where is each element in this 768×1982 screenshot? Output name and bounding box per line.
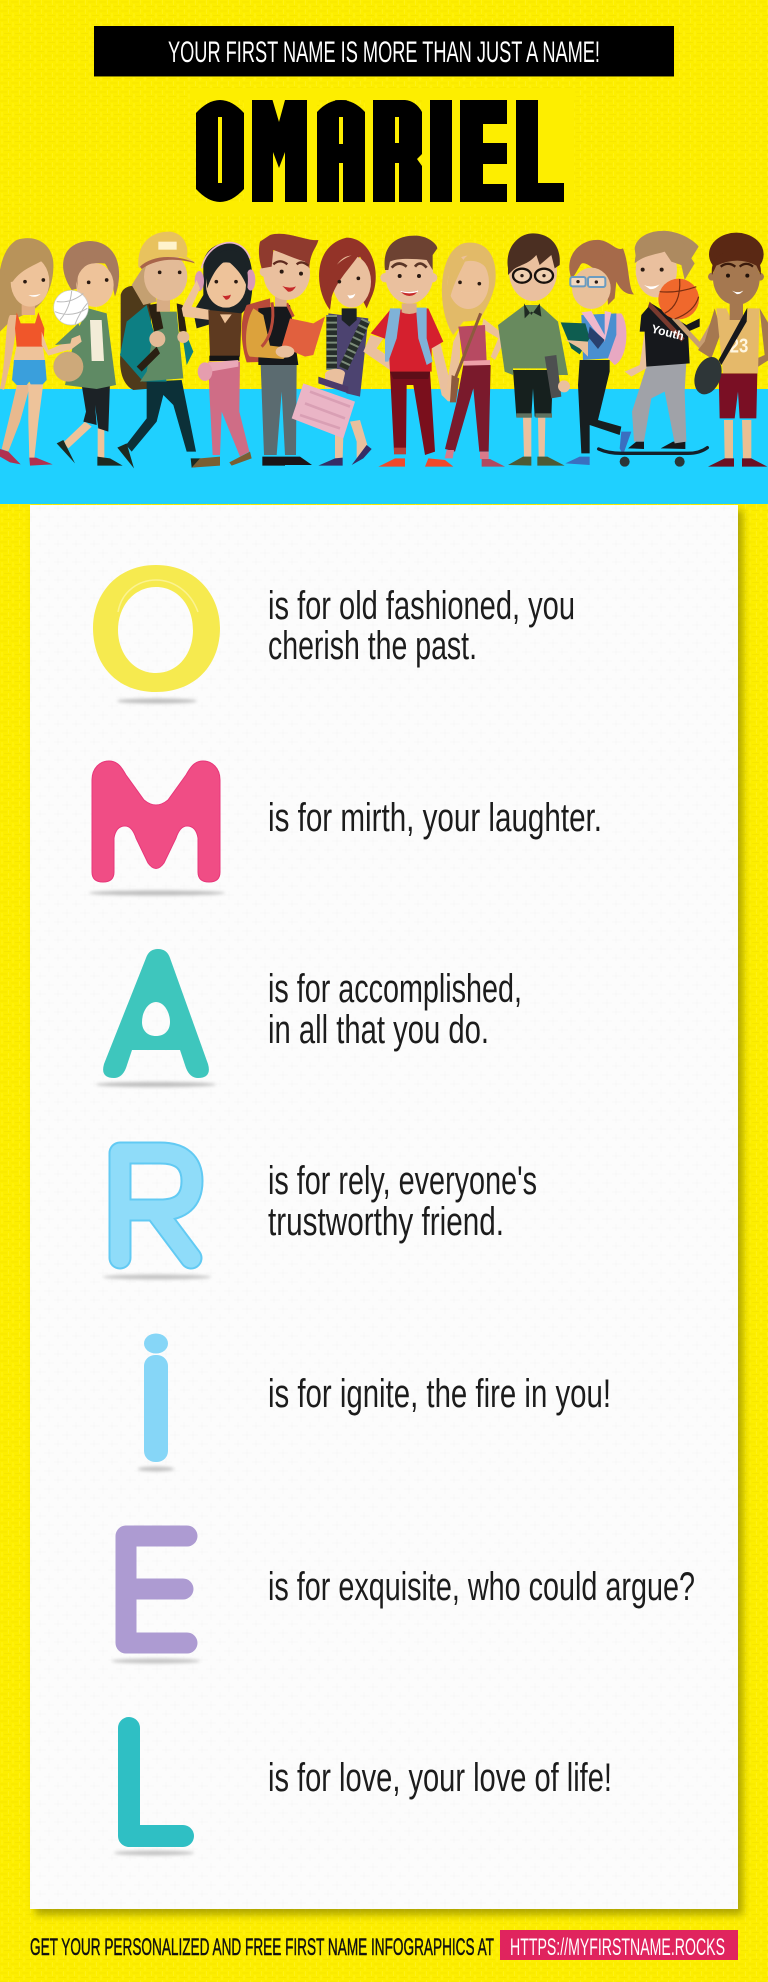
person: girl with volleyball (53, 241, 123, 466)
title: name (190, 72, 575, 229)
letter A (96, 949, 216, 1087)
person: boy with glasses (498, 233, 570, 466)
letter R (103, 1153, 211, 1280)
title: name: A (320, 72, 362, 229)
title: name: M (250, 72, 309, 229)
letter M (89, 761, 225, 896)
header banner (94, 26, 674, 77)
person: girl with ponytail and book (561, 240, 634, 465)
text: R line: trustworthy friend. (268, 1200, 504, 1244)
letter E (112, 1536, 200, 1664)
text: O line: cherish the past. (268, 624, 477, 668)
text: O line (268, 584, 575, 668)
text: L line: is for love, your love of life! (268, 1756, 612, 1800)
illustration: group of young people (0, 231, 768, 468)
person: boy with cap and backpack (117, 232, 201, 468)
person: girl in orange top (0, 238, 82, 466)
text: A line: in all that you do. (268, 1008, 489, 1052)
text: I line: is for ignite, the fire in you! (268, 1372, 611, 1416)
title: name: E (458, 72, 504, 229)
title: name: I (426, 72, 456, 229)
person: blonde girl (442, 243, 507, 467)
letter I (138, 1334, 174, 1472)
person: boy on skateboard with basketball: Youth (650, 322, 685, 343)
blue ground band (0, 389, 768, 504)
person: girl with headphones (182, 242, 255, 468)
text: A line: is for accomplished, (268, 967, 522, 1011)
person: boy in red shirt (363, 236, 453, 467)
letter O (93, 565, 220, 704)
text: O line: is for old fashioned, you (268, 584, 575, 628)
text: M line: is for mirth, your laughter. (268, 796, 602, 840)
title: name: O (198, 78, 242, 224)
letter L (114, 1728, 194, 1856)
person: boy in yellow tank with shoulder bag: 23 (730, 335, 748, 357)
person: boy in yellow tank with shoulder bag (689, 233, 768, 467)
text: A line (268, 967, 522, 1052)
title: name: L (514, 72, 561, 229)
title: name: R (371, 72, 419, 229)
person: boy reading book (242, 234, 325, 466)
person: boy on skateboard with basketball (599, 231, 713, 467)
panel: acrostic content (30, 505, 743, 1915)
text: R line (268, 1159, 537, 1244)
person: girl with pink bag (292, 238, 376, 466)
text: R line: is for rely, everyone's (268, 1159, 537, 1203)
